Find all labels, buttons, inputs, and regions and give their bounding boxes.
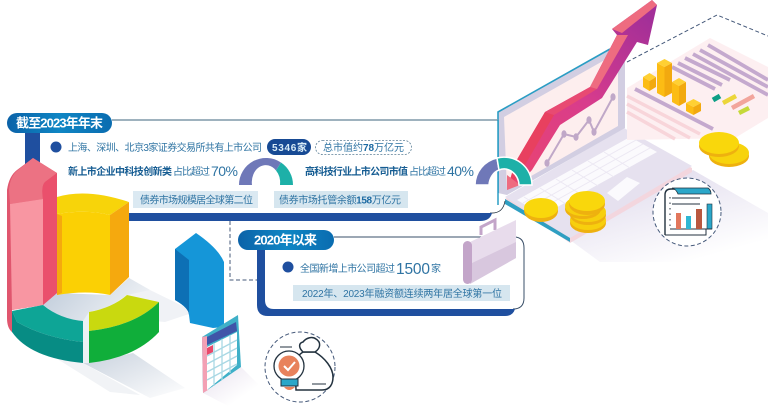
blue column fragment (175, 233, 224, 328)
report sheets and mini charts (627, 15, 768, 140)
stat: new listings: 1500 (396, 261, 430, 278)
heading pill: as of end of 2023 (7, 113, 112, 133)
heading pill: as of end of 2023: 截至2023年年末 (16, 116, 103, 130)
text block: listed companies: 总市值约78万亿元 (323, 141, 404, 154)
stat: high-tech share: 40% (447, 163, 474, 179)
icon: report chart (653, 178, 721, 246)
laptop illustration (498, 49, 768, 262)
callout: financing record (293, 285, 510, 301)
text block: listed companies: 上海、深圳、北京3家证券交易所共有上市公司 (68, 141, 262, 154)
pie chart illustration (7, 158, 195, 398)
stat: tech innovation share (68, 163, 238, 179)
stat: high-tech share: 占比超过 (409, 165, 446, 178)
panel: as of end of 2023 (25, 120, 505, 221)
stat: new listings: 家 (431, 262, 441, 275)
donut gauge 40% (475, 157, 532, 190)
callout: bond market size: 债券市场规模居全球第二位 (140, 194, 253, 206)
stat: high-tech share (305, 163, 474, 179)
rising arrow (507, 0, 657, 190)
callout: financing record: 2022年、2023年融资额连续两年居全球第一位 (302, 287, 502, 300)
icon: calculator (202, 315, 262, 408)
stat: tech innovation share: 占比超过 (173, 165, 210, 178)
donut gauge 70% (239, 158, 293, 185)
stat: new listings (282, 261, 441, 278)
callout: bond custody balance (274, 191, 408, 208)
callout: bond custody balance: 债券市场托管余额158万亿元 (279, 194, 401, 206)
stat: high-tech share: 高科技行业上市公司市值 (305, 165, 408, 178)
stat: new listings: 全国新增上市公司超过 (300, 262, 395, 275)
panel: since 2020 (230, 221, 524, 316)
callout: bond market size (133, 191, 258, 208)
stat: tech innovation share: 70% (211, 163, 238, 179)
heading pill: since 2020 (238, 230, 334, 250)
text block: listed companies: 5346家 (272, 141, 307, 154)
text block: listed companies (50, 139, 412, 155)
stat: tech innovation share: 新上市企业中科技创新类 (68, 165, 172, 178)
briefcase (463, 220, 516, 284)
coins (524, 132, 749, 233)
icon: lightbulb and money bag (265, 332, 335, 402)
heading pill: since 2020: 2020年以来 (254, 232, 317, 248)
